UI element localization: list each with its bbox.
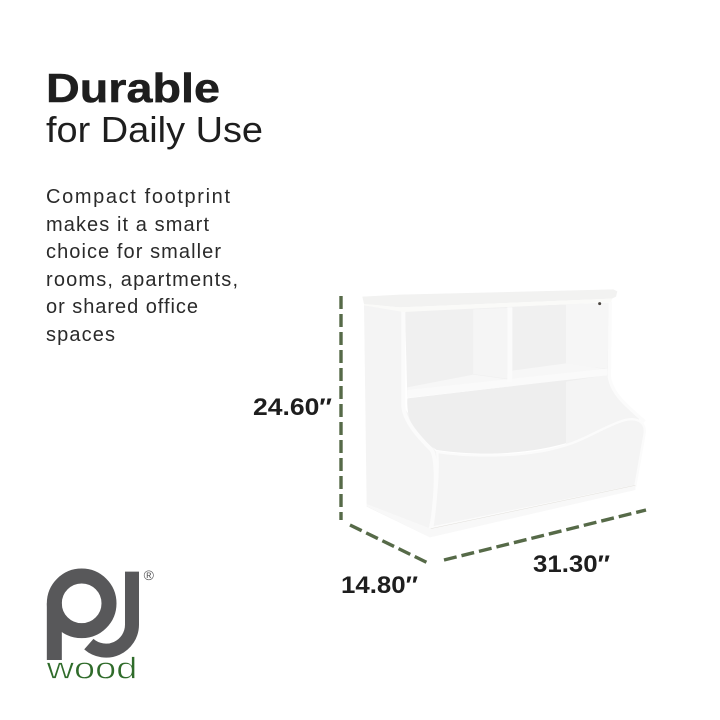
front bin panel <box>430 419 645 528</box>
side panel <box>364 303 437 537</box>
title <box>46 65 263 150</box>
text block: description: or shared office <box>46 296 198 318</box>
text block: description: makes it a smart <box>46 214 209 236</box>
logo: pj wood <box>45 567 155 685</box>
letter j <box>89 572 132 651</box>
registered mark: ® <box>144 567 155 583</box>
left front edge <box>403 310 436 537</box>
text block: description: rooms, apartments, <box>46 269 238 291</box>
text block: description: choice for smaller <box>46 241 221 263</box>
wordmark: wood <box>45 651 137 685</box>
hardware dot <box>598 302 601 305</box>
text block: description: spaces <box>46 324 115 346</box>
lower bin back <box>407 375 643 454</box>
text block: description: Compact footprint <box>46 186 230 208</box>
dimension line: height <box>339 296 343 520</box>
divider <box>507 307 512 383</box>
base <box>367 485 635 537</box>
upper back panel <box>405 303 610 397</box>
right inner wall <box>566 303 609 369</box>
product: white bookcase <box>362 289 645 537</box>
label: height: 24.60″ <box>253 394 333 421</box>
text block: description <box>46 186 238 346</box>
right front edge <box>609 302 645 422</box>
label: depth: 14.80″ <box>341 572 419 599</box>
top board <box>362 289 617 307</box>
shelf front edge <box>407 369 607 398</box>
dimension line: width <box>444 510 646 560</box>
label: width: 31.30″ <box>533 551 611 578</box>
dimension line: depth <box>350 525 428 563</box>
title: Durable <box>46 65 220 111</box>
shelf surface <box>407 375 507 397</box>
letter p <box>54 576 109 660</box>
title: for Daily Use <box>46 109 263 150</box>
